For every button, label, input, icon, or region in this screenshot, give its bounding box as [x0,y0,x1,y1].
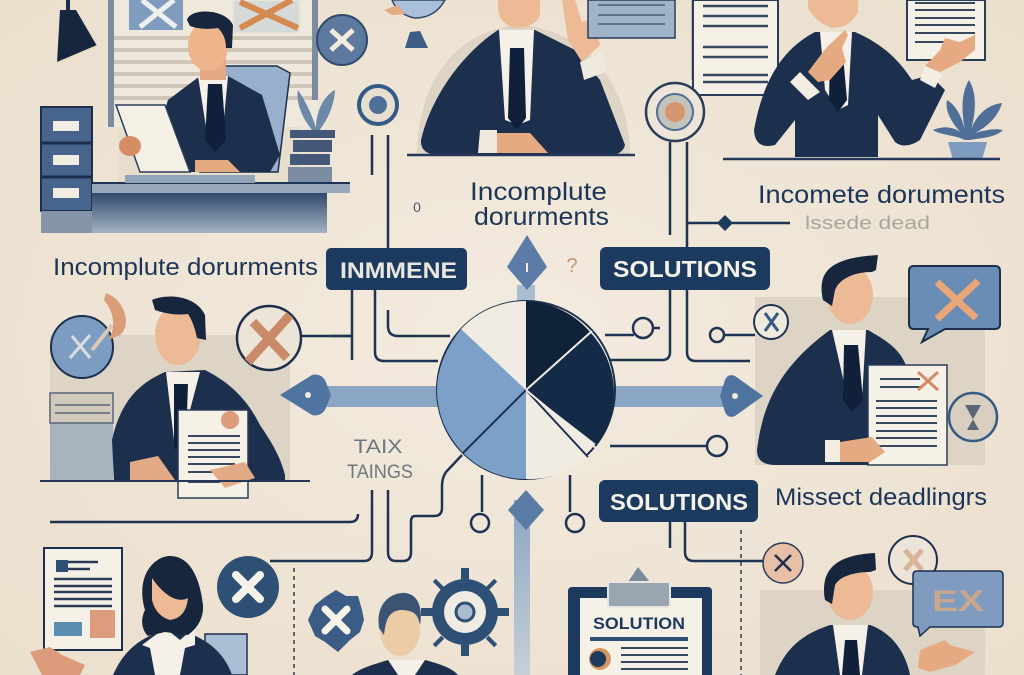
panel: solution clipboard: SOLUTION [593,614,685,633]
icon: x seal [308,590,364,652]
panel: mid-right person [757,255,1000,465]
speech bubble: EX [932,585,984,618]
slice: left blue [437,329,526,453]
hand [119,136,141,156]
icon: blue x frame [129,0,183,30]
floor line [40,480,310,482]
label box: INMMENE: INMMENE [340,258,457,283]
icon: x circle [217,556,279,618]
panel: solution clipboard [568,567,712,675]
chart: pie [437,301,615,479]
text: TAIX TAINGS: TAINGS [347,462,413,483]
desk [92,175,350,233]
chair [205,634,247,675]
slice: right navy [526,332,614,445]
band bottom [514,500,530,675]
hand [840,437,885,462]
open hand [925,35,975,72]
diamond bottom [508,490,544,530]
slice: top-right navy [526,301,590,390]
heading: Incomete doruments: Incomete doruments [758,181,1005,209]
raised hand [562,0,600,62]
panel: top-right person [693,0,1003,160]
dashed vertical lines [294,530,741,675]
icon: hourglass circle [949,393,997,441]
slice lines [463,390,588,457]
person at desk [155,12,280,172]
raised arm cuff [580,52,606,80]
label box: SOLUTIONS top: SOLUTIONS [613,256,757,282]
paper left [693,0,778,95]
slice: bottom white [526,390,588,479]
diamond top [507,235,547,290]
heading: Incomplute dorurments left: Incomplute dorurments [53,254,318,281]
label box: SOLUTIONS lower [599,480,758,522]
text: TAIX TAINGS [347,437,413,483]
hands [30,647,85,675]
label box: INMMENE [326,248,467,290]
cuff [825,440,840,462]
diamond right [720,375,763,417]
label box: SOLUTIONS lower: SOLUTIONS [610,489,748,515]
speech bubble [913,571,1003,636]
hand [210,462,255,488]
heading: Missect deadlingrs: Missect deadlingrs [775,484,987,511]
grey box [50,393,113,480]
window blinds [108,0,318,127]
document [44,548,122,650]
small orphan mark: 0 [413,199,421,215]
left cuff [790,72,820,100]
panel: bottom-left person [30,548,247,675]
small diamond node [717,215,733,231]
panel: top-left office scene [41,0,350,233]
label box: SOLUTIONS top [600,247,770,290]
panel: bottom-right person [763,536,1003,675]
floor line [407,154,635,156]
band right [612,386,725,407]
icon: blue circle [51,293,126,378]
window frame [111,0,315,127]
panel: top-center person [407,0,675,155]
band left [325,386,440,407]
plant [933,80,1003,160]
icon: x badge left [763,543,803,583]
document [178,410,248,498]
hand at chin [808,30,848,82]
heading: Incomplute dorurments center [470,178,609,231]
paper right [907,0,985,60]
panel: bottom-center person [352,593,458,675]
document [868,365,947,465]
diamond left [280,375,331,415]
slice: top-left light [461,301,526,390]
right cuff [920,66,942,88]
icon: hanging lamp [57,0,97,63]
icon: orange x circle [237,306,301,370]
icon: badge right of pie [754,305,788,339]
icon: circle x top [317,15,367,65]
heading: Incomplute dorurments center: dorurments [474,203,609,231]
held paper [588,0,675,38]
band top [517,285,535,305]
icon: small triangle [405,31,428,48]
woman [113,556,232,675]
slice: lower-left blue [463,390,526,479]
icon: small blue bowl [384,0,445,18]
icon: orange badge [646,83,704,141]
paper held [116,105,190,172]
text: TAIX TAINGS: TAIX [354,437,403,458]
faint subheading: lssede dead [805,213,930,233]
heading: Incomplute dorurments center: Incomplute [470,178,607,206]
chair [200,66,290,172]
icon: orange x frame [233,0,300,33]
plant [288,90,335,183]
icon: gear [427,574,503,650]
file cabinet [41,107,92,233]
icon: x badge right [889,536,937,584]
connector lines [50,0,790,561]
floor line [723,158,1000,160]
small node circles [471,318,727,532]
blind slats [114,38,312,98]
icon: round badge [359,86,397,124]
person [112,297,285,481]
speech bubble [909,266,1000,342]
panel: mid-left person [40,293,310,498]
open hand [918,640,975,672]
small question mark: ? [566,255,578,277]
